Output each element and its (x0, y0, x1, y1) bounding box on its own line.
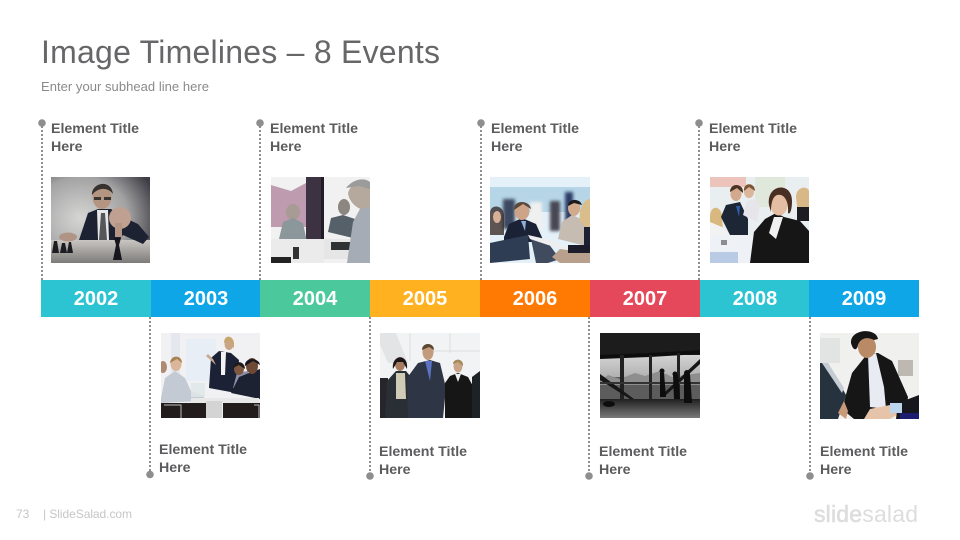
connector 2005 (366, 317, 374, 480)
segment 2002 (41, 280, 151, 317)
page number: 73 (16, 507, 30, 521)
label 2007: Here (599, 462, 631, 478)
subhead: Enter your subhead line here (41, 79, 209, 94)
connector 2003 (146, 317, 154, 478)
segment 2008: 2008 (733, 288, 777, 310)
connector 2009 (806, 317, 814, 480)
segment 2002: 2002 (74, 288, 118, 310)
segment 2003: 2003 (184, 288, 228, 310)
connector 2004 (256, 119, 264, 280)
segment 2007 (590, 280, 700, 317)
label 2007: Element Title (599, 444, 687, 460)
label 2003: Element Title (159, 442, 247, 458)
connector 2002 (38, 119, 46, 280)
segment 2008 (700, 280, 809, 317)
photo: business team walking (380, 333, 480, 418)
photo: team meeting at whiteboard (159, 333, 260, 418)
label 2005: Here (379, 462, 411, 478)
photo: businessman playing chess (51, 177, 150, 263)
event 2006 (477, 119, 590, 280)
year bar (41, 280, 919, 317)
segment 2006: 2006 (513, 288, 557, 310)
event 2008 (695, 119, 809, 280)
label 2002: Here (51, 139, 83, 155)
label 2008: Here (709, 139, 741, 155)
label 2003: Here (159, 460, 191, 476)
photo: colleagues with laptops (490, 177, 590, 263)
event 2004 (256, 119, 370, 280)
event 2009 (806, 317, 919, 480)
label 2005: Element Title (379, 444, 467, 460)
event 2005 (366, 317, 480, 480)
label 2004: Element Title (270, 121, 358, 137)
segment 2004 (260, 280, 370, 317)
segment 2004: 2004 (293, 288, 338, 310)
label 2002: Element Title (51, 121, 139, 137)
label 2009: Here (820, 462, 852, 478)
label 2009: Element Title (820, 444, 908, 460)
photo: businesswoman shaking hands (820, 331, 919, 419)
label 2004: Here (270, 139, 302, 155)
event 2007 (585, 317, 700, 480)
photo: office seen through glass (271, 177, 370, 263)
event 2003 (146, 317, 260, 478)
connector 2008 (695, 119, 703, 280)
segment 2009 (809, 280, 919, 317)
connector 2007 (585, 317, 593, 480)
segment 2005 (370, 280, 480, 317)
photo: silhouettes at skyline window (600, 333, 700, 418)
label 2008: Element Title (709, 121, 797, 137)
segment 2009: 2009 (842, 288, 886, 310)
label 2006: Here (491, 139, 523, 155)
photo: smiling businesswoman at table (710, 177, 809, 263)
label 2006: Element Title (491, 121, 579, 137)
segment 2007: 2007 (623, 288, 667, 310)
event 2002 (38, 119, 150, 280)
segment 2005: 2005 (403, 288, 447, 310)
connector 2006 (477, 119, 485, 280)
segment 2006 (480, 280, 590, 317)
title: Image Timelines – 8 Events (41, 34, 440, 70)
footer credit: | SlideSalad.com (43, 507, 132, 521)
logo wordmark: slidesalad (814, 501, 918, 527)
segment 2003 (151, 280, 260, 317)
